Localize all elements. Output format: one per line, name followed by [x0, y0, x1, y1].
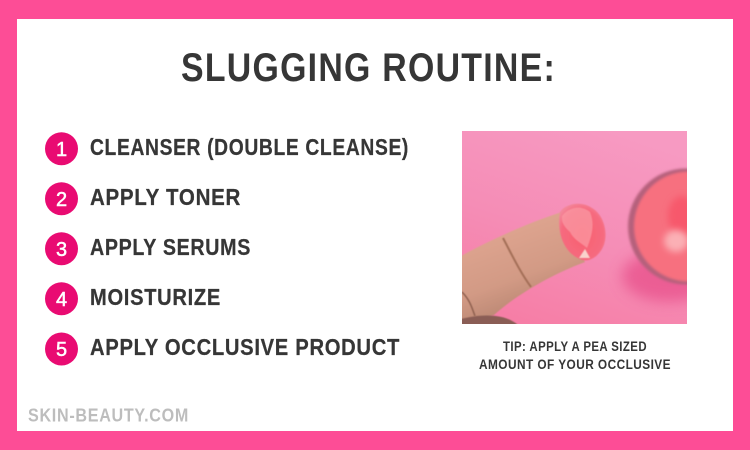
step 3: 3 [56, 239, 67, 261]
step 1 [45, 132, 409, 165]
caption [479, 339, 671, 372]
step 3: APPLY SERUMS [90, 234, 251, 260]
photo: occlusive on fingertip [462, 131, 687, 324]
title: SLUGGING ROUTINE: [181, 46, 556, 90]
step 5: 5 [56, 339, 67, 361]
step 3 [45, 232, 251, 265]
step 2 [45, 182, 241, 215]
step 4 [45, 282, 221, 315]
website footer: SKIN-BEAUTY.COM [28, 404, 189, 426]
caption: AMOUNT OF YOUR OCCLUSIVE [479, 357, 671, 372]
step 2: 2 [56, 189, 67, 211]
step 4: MOISTURIZE [90, 284, 221, 310]
step 5 [45, 332, 400, 366]
step 1: 1 [56, 139, 67, 161]
step 4: 4 [56, 289, 67, 311]
step 1: CLEANSER (DOUBLE CLEANSE) [90, 134, 409, 160]
caption: TIP: APPLY A PEA SIZED [503, 339, 647, 354]
step 5: APPLY OCCLUSIVE PRODUCT [90, 334, 400, 360]
step 2: APPLY TONER [90, 184, 241, 210]
